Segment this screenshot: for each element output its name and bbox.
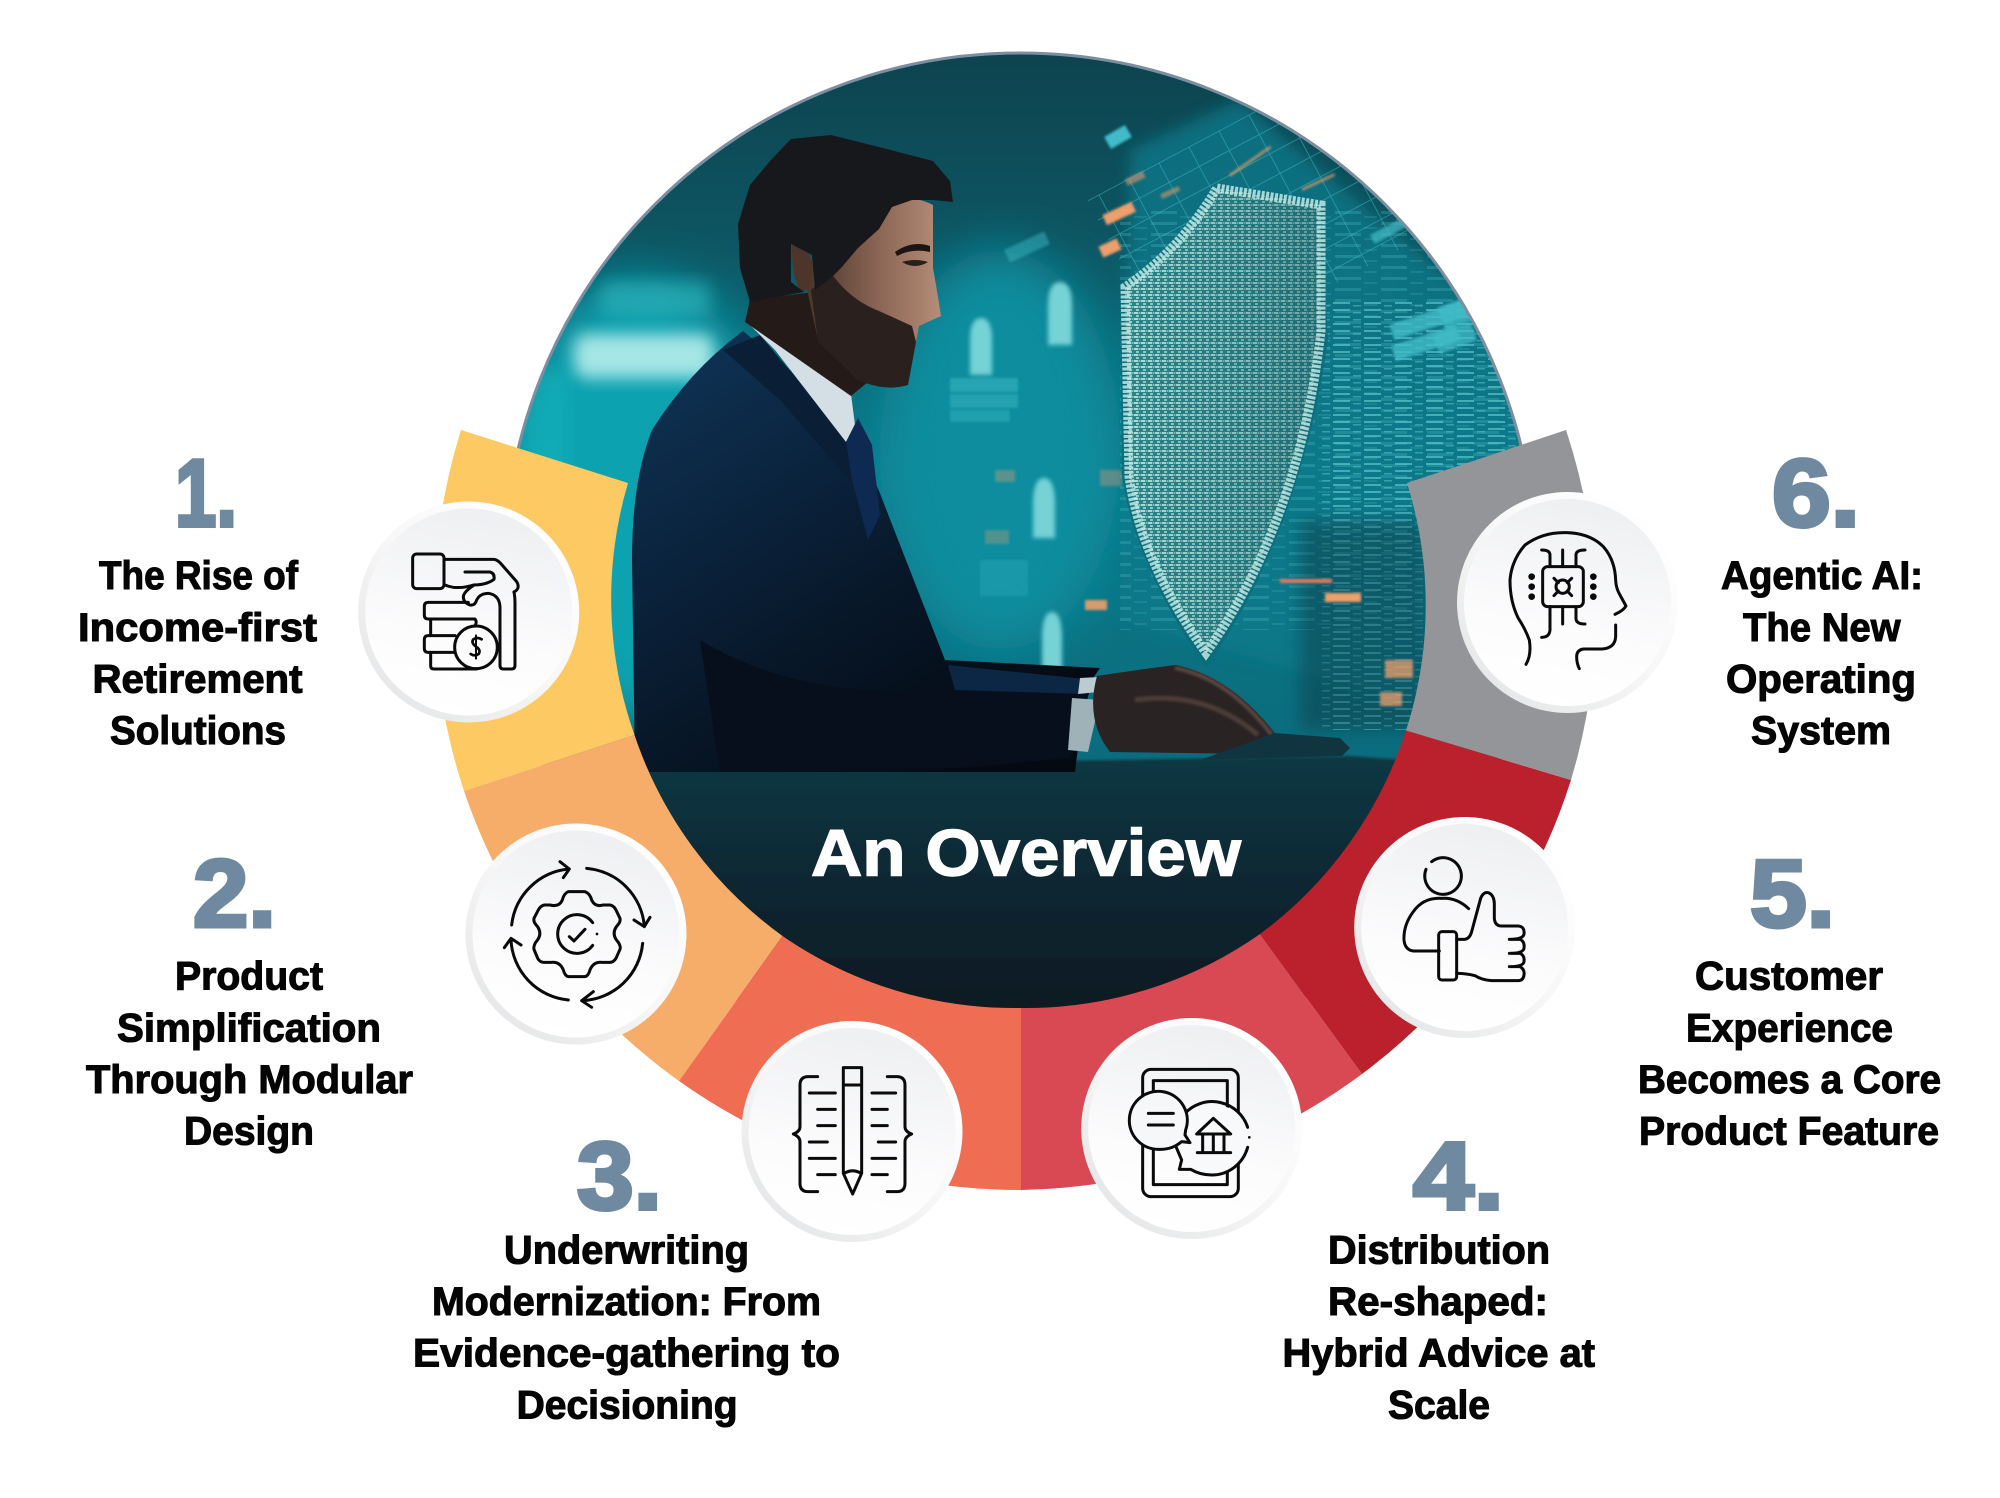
icon 6: head with chip bbox=[1457, 492, 1678, 713]
label 2: Through Modular bbox=[86, 1058, 413, 1102]
number 6: 6. bbox=[1772, 440, 1860, 547]
eye and brow bbox=[895, 244, 930, 256]
label 3: Underwriting bbox=[504, 1228, 749, 1272]
face bbox=[805, 196, 941, 384]
label 5 bbox=[1638, 955, 1941, 1154]
label 2: Simplification bbox=[117, 1006, 381, 1050]
label 6: Agentic AI: bbox=[1721, 554, 1923, 598]
segment 5 red bbox=[1260, 730, 1571, 1074]
label 1 bbox=[78, 554, 317, 753]
label 4: Re-shaped: bbox=[1328, 1280, 1548, 1324]
label 5: Experience bbox=[1686, 1006, 1893, 1050]
label 3: Modernization: From bbox=[432, 1280, 821, 1324]
segment 3 coral bbox=[679, 936, 1021, 1190]
lower sleeve bbox=[700, 640, 1090, 772]
number 1: 1. bbox=[175, 440, 237, 547]
label 6: Operating bbox=[1726, 658, 1916, 702]
photo border bbox=[504, 53, 1536, 1085]
icon 2: gear with cycle arrows bbox=[466, 824, 686, 1044]
ear bbox=[792, 245, 813, 292]
hair bbox=[738, 135, 953, 302]
suit bbox=[632, 331, 1100, 772]
label 2: Product bbox=[175, 955, 323, 999]
left teal glow bbox=[500, 280, 780, 720]
label 1: Solutions bbox=[110, 709, 286, 753]
label 1: Income-first bbox=[78, 606, 317, 650]
label 1: The Rise of bbox=[99, 554, 299, 598]
right side screen with code bbox=[950, 31, 1530, 730]
tie bbox=[846, 418, 880, 540]
hand bbox=[1093, 665, 1280, 754]
man bbox=[632, 135, 1350, 772]
number 4: 4. bbox=[1413, 1123, 1504, 1230]
laptop bbox=[1200, 733, 1350, 760]
item 3 text bbox=[413, 1123, 840, 1427]
table bbox=[545, 754, 1396, 1008]
segment 4 pink bbox=[1021, 934, 1362, 1190]
label 6: System bbox=[1751, 709, 1891, 753]
label 4: Distribution bbox=[1328, 1228, 1550, 1272]
item 4 text bbox=[1282, 1123, 1595, 1427]
label 3: Evidence-gathering to bbox=[413, 1332, 840, 1376]
item 1 text bbox=[78, 440, 317, 753]
coloured ring segments bbox=[434, 430, 1596, 1190]
shirt collar bbox=[745, 320, 855, 442]
label 2 bbox=[86, 955, 413, 1154]
label 6: The New bbox=[1743, 606, 1901, 650]
photo: businessman with digital shield bbox=[520, 54, 1520, 1008]
cuffs bbox=[1078, 677, 1097, 694]
centre teal wash bbox=[880, 250, 1120, 650]
label 5: Becomes a Core bbox=[1638, 1058, 1941, 1102]
icon 5: person with thumbs up bbox=[1354, 817, 1575, 1038]
padlock glows bbox=[970, 282, 1072, 670]
item 6 text bbox=[1721, 440, 1923, 753]
item 2 text bbox=[86, 841, 413, 1154]
icon 4: tablet with chat and bank bbox=[1081, 1018, 1302, 1239]
item 5 text bbox=[1638, 841, 1941, 1154]
label 5: Product Feature bbox=[1639, 1110, 1939, 1154]
label 4: Scale bbox=[1388, 1383, 1490, 1427]
digital shield bbox=[1110, 180, 1330, 670]
beard bbox=[811, 273, 916, 388]
label 2: Design bbox=[184, 1110, 314, 1154]
number 2: 2. bbox=[193, 841, 276, 948]
number 3: 3. bbox=[577, 1123, 662, 1230]
title: An Overview bbox=[811, 816, 1242, 890]
label 4 bbox=[1282, 1228, 1595, 1427]
icon 3: pencil and notes bbox=[742, 1021, 962, 1242]
icon 1: hand with coins bbox=[358, 502, 579, 722]
label 6 bbox=[1721, 554, 1923, 753]
label 4: Hybrid Advice at bbox=[1282, 1332, 1595, 1376]
segment 1 yellow bbox=[434, 430, 634, 791]
lapel bbox=[723, 335, 843, 450]
label 5: Customer bbox=[1695, 955, 1883, 999]
label 3 bbox=[413, 1228, 840, 1427]
segment 2 orange bbox=[464, 735, 782, 1081]
segment 6 grey bbox=[1406, 430, 1596, 780]
label 3: Decisioning bbox=[517, 1383, 738, 1427]
number 5: 5. bbox=[1750, 841, 1835, 948]
label 1: Retirement bbox=[92, 658, 302, 702]
neck bbox=[745, 292, 866, 396]
